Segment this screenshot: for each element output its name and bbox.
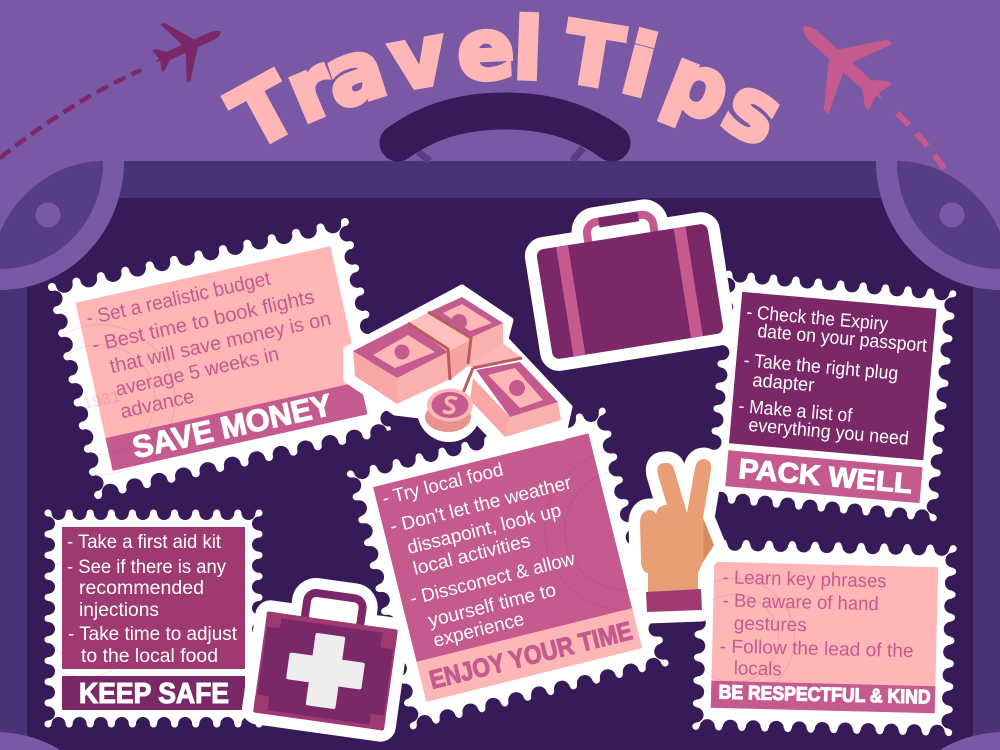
- text block: enjoy your time tips: experience: [431, 609, 527, 652]
- text block: save money tips: that will save money is on: [108, 308, 333, 378]
- bottom right corner cap: [940, 732, 1000, 750]
- text block: keep safe tips: recommended: [79, 578, 204, 599]
- text block: enjoy your time tips: yourself time to: [426, 580, 558, 632]
- text block: enjoy your time tips: local activities: [411, 531, 533, 580]
- text block: enjoy your time tips: dissapoint, look up: [405, 500, 564, 559]
- text block: keep safe tips: injections: [79, 600, 159, 621]
- postmark: 1931: [81, 387, 122, 413]
- postmark: [62, 324, 176, 476]
- text block: keep safe tips: - Take a first aid kit: [67, 532, 222, 553]
- text block: keep safe tips: - See if there is any: [67, 557, 226, 578]
- panel: save money stamp: [48, 218, 391, 499]
- text block: pack well tips: - Make a list of: [738, 396, 854, 427]
- text block: pack well tips: adapter: [752, 370, 816, 397]
- text block: pack well tips: - Check the Expiry: [746, 302, 889, 335]
- text block: save money tips: - Best time to book flights: [90, 286, 317, 357]
- dashed flight path right: [897, 113, 945, 170]
- icon: plane right: [771, 0, 915, 135]
- coin: [425, 388, 473, 432]
- top left corner cap: [0, 161, 124, 290]
- text block: be respectful tips: - Follow the lead of the: [719, 636, 914, 662]
- panel: pack well stamp: [705, 274, 953, 518]
- text block: be respectful tips: - Be aware of hand: [722, 591, 879, 615]
- panel: be respectful stamp: [672, 542, 953, 733]
- suitcase body: [0, 161, 1000, 750]
- text block: pack well tips: date on your passport: [757, 321, 928, 357]
- text block: pack well tips: everything you need: [748, 415, 910, 450]
- right stack of notes: [463, 343, 561, 437]
- text block: be respectful tips: - Learn key phrases: [722, 567, 887, 592]
- postmark: [48, 561, 116, 676]
- text block: save money tips: advance: [118, 386, 196, 423]
- text block: save money tips: average 5 weeks in: [113, 343, 281, 401]
- icon: peace hand sticker: [640, 459, 714, 612]
- panel: keep safe stamp: [25, 513, 259, 724]
- background: suitcase lid: [0, 0, 1000, 161]
- dashed flight path left: [0, 70, 141, 158]
- text block: enjoy your time tips: - Don't let the weather: [388, 472, 574, 538]
- text block: pack well tips: [736, 302, 930, 451]
- text block: enjoy your time tips: - Dissconect & allow: [408, 549, 577, 610]
- bottom left corner cap: [0, 732, 60, 750]
- text block: pack well tips: - Take the right plug: [743, 350, 899, 385]
- text block: be respectful tips: locals: [733, 658, 782, 680]
- text block: keep safe tips: to the local food: [81, 646, 218, 667]
- title: Travel Tips: [215, 0, 799, 168]
- postmark: [704, 578, 795, 694]
- text block: enjoy your time tips: - Try local food: [380, 459, 506, 510]
- heading: enjoy your time: ENJOY YOUR TIME: [426, 615, 635, 695]
- icon: money sticker: [346, 287, 570, 446]
- postmark: [717, 345, 738, 430]
- icon: suitcase sticker: [532, 201, 724, 360]
- panel: enjoy your time stamp: [346, 408, 669, 730]
- text block: be respectful tips: [719, 567, 916, 684]
- back stack of notes: [429, 297, 503, 380]
- postmark: [594, 452, 636, 610]
- front stack of notes: [353, 312, 472, 404]
- text block: keep safe tips: [67, 532, 238, 667]
- text block: save money tips: - Set a realistic budget: [84, 268, 273, 330]
- heading: pack well: PACK WELL: [737, 453, 914, 499]
- icon: plane left: [142, 3, 234, 91]
- heading: save money: SAVE MONEY: [129, 387, 335, 465]
- heading: keep safe: KEEP SAFE: [79, 678, 229, 710]
- text block: keep safe tips: - Take time to adjust: [68, 624, 238, 645]
- heading: be respectful and kind: BE RESPECTFUL & KIND: [718, 681, 931, 709]
- text block: enjoy your time tips: [380, 444, 604, 656]
- icon: first aid kit sticker: [253, 583, 402, 731]
- text block: save money tips: [84, 257, 343, 426]
- top right corner cap: [876, 161, 1000, 290]
- text block: be respectful tips: gestures: [734, 613, 807, 636]
- suitcase handle: [398, 111, 612, 161]
